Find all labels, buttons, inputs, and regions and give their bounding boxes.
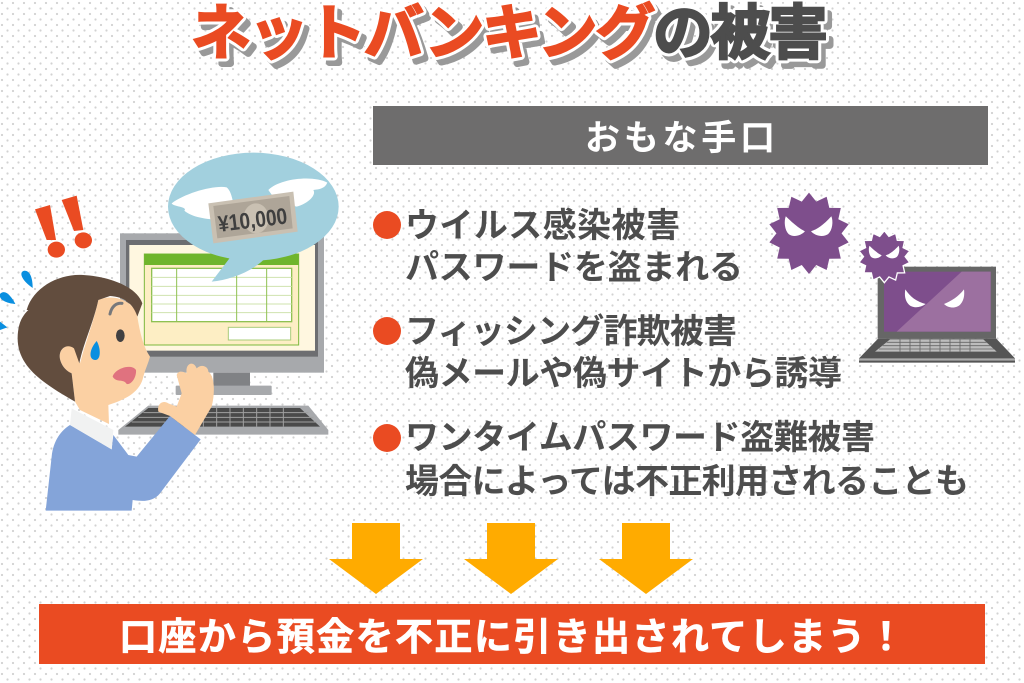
title: ネットバンキングの被害 bbox=[191, 0, 828, 67]
header bar: main methods: おもな手口 bbox=[585, 119, 775, 158]
item 3: one-time password theft: 場合によっては不正利用されることも bbox=[405, 463, 969, 501]
item 1: virus infection: パスワードを盗まれる bbox=[405, 249, 743, 287]
man figure bbox=[18, 275, 214, 511]
icon: speech bubble with flying money: ¥10,000 bbox=[217, 203, 289, 237]
result banner bbox=[39, 604, 985, 664]
item 2: phishing fraud bbox=[373, 313, 842, 393]
icon: laptop with evil eyes bbox=[859, 267, 1015, 363]
icon: large virus bbox=[769, 193, 849, 274]
illustration: viruses and laptop bbox=[769, 193, 1015, 363]
icon: speech bubble with flying money bbox=[168, 153, 339, 282]
item 1: virus infection bbox=[373, 207, 743, 287]
icon: keyboard bbox=[118, 406, 328, 435]
item 2: phishing fraud: 偽メールや偽サイトから誘導 bbox=[405, 355, 842, 393]
title: ネットバンキングの被害 bbox=[191, 0, 828, 67]
item 3: one-time password theft bbox=[373, 419, 969, 501]
result banner: 口座から預金を不正に引き出されてしまう！ bbox=[119, 617, 905, 659]
item 3: one-time password theft: ワンタイムパスワード盗難被害 bbox=[405, 419, 875, 457]
icon: exclamation marks bbox=[35, 196, 92, 258]
item 2: phishing fraud: フィッシング詐欺被害 bbox=[405, 313, 737, 351]
icon: small virus bbox=[859, 231, 910, 283]
header bar: main methods bbox=[373, 106, 988, 165]
icon: computer monitor bbox=[120, 233, 324, 395]
arrows pointing down bbox=[329, 523, 693, 594]
title: ネットバンキングの被害 bbox=[196, 6, 833, 73]
icon: sweat drops bbox=[0, 271, 33, 330]
illustration: worried man at computer bbox=[0, 153, 339, 511]
item 1: virus infection: ウイルス感染被害 bbox=[405, 207, 680, 245]
